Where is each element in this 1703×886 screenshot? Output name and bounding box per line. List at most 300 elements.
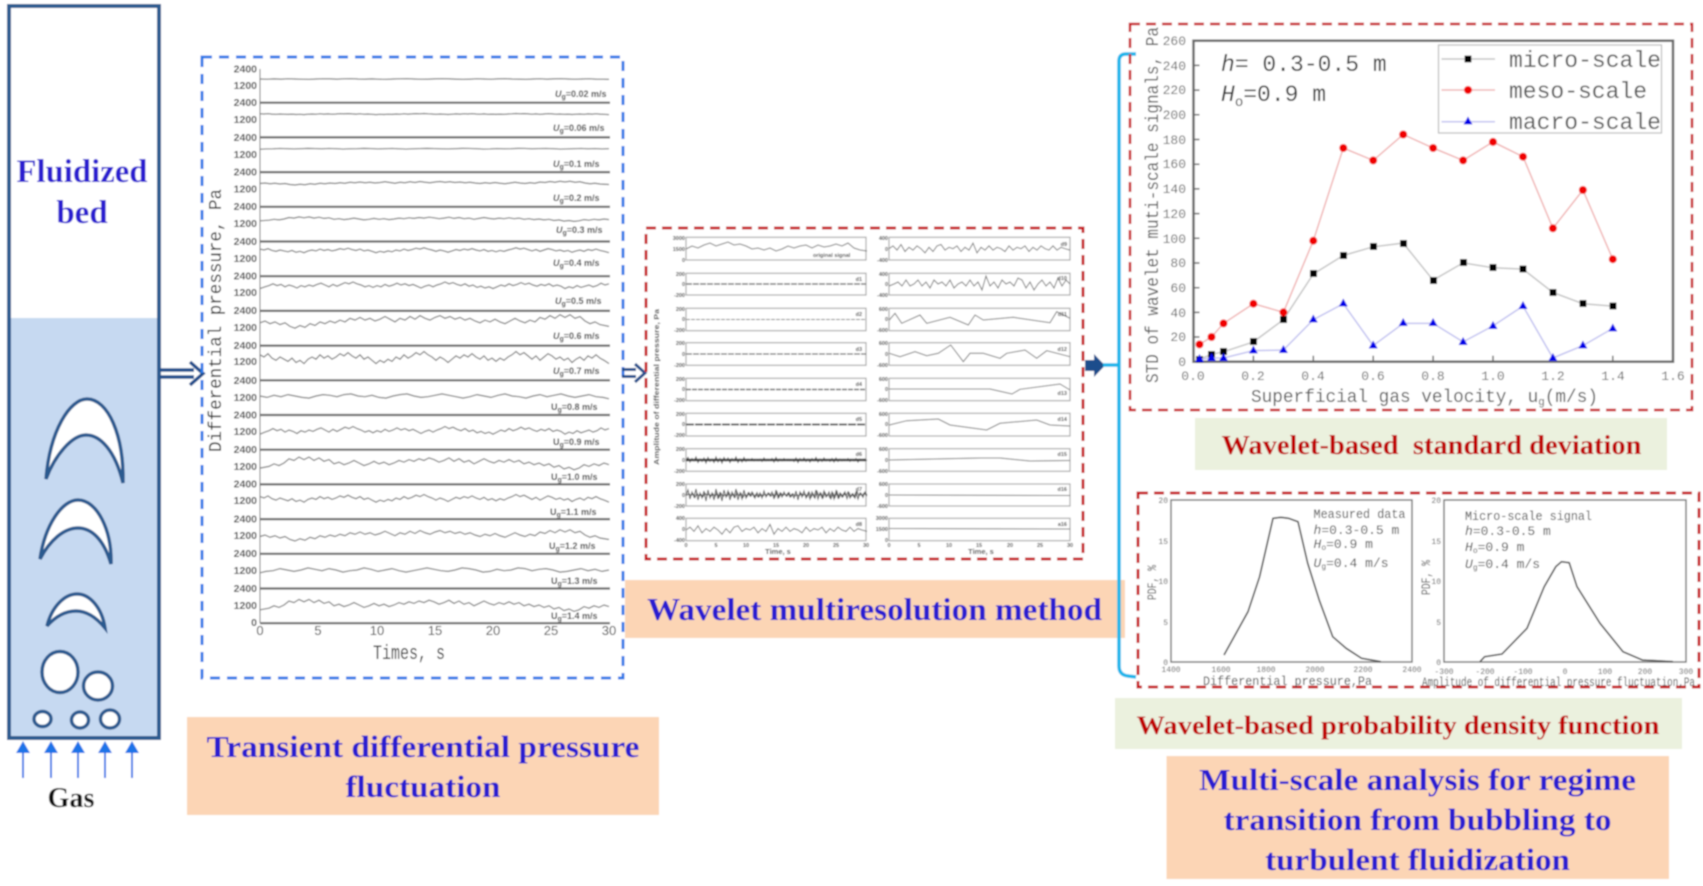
subplot x tick labels and titles: 20	[1007, 543, 1013, 549]
x tick labels: 1.4	[1601, 369, 1625, 384]
label box: multi-scale analysis: transition from bubbling to	[1224, 802, 1612, 837]
y tick labels: 20	[1170, 330, 1186, 345]
gas velocity row labels: g	[556, 512, 561, 519]
left pdf chart: 2000	[1305, 666, 1325, 675]
x tick labels: 20	[486, 623, 500, 638]
subplot y tick labels: 0	[682, 527, 685, 533]
left pdf chart: 2400	[1402, 666, 1422, 675]
y tick labels: 1200	[234, 80, 257, 92]
subplot y tick labels: 0	[885, 352, 888, 358]
annotation: h and H0: =0.9 m	[1243, 82, 1326, 108]
gas velocity row labels: U	[555, 89, 562, 99]
y tick labels: 1200	[234, 114, 257, 126]
subplot y tick labels: 0	[682, 493, 685, 499]
right pdf chart: 0	[1436, 659, 1441, 668]
subplot x tick labels and titles: 20	[803, 543, 809, 549]
subplot y tick labels: 200	[676, 482, 685, 488]
left pdf chart: Measured data	[1314, 507, 1406, 522]
label box: wavelet multiresolution method: Wavelet multiresolution method	[647, 591, 1102, 627]
gas velocity row labels: g	[558, 581, 562, 588]
subplot y tick labels: 200	[676, 412, 685, 418]
subplot y tick labels: -400	[877, 258, 888, 264]
subplot y tick labels: 600	[879, 412, 888, 418]
right pdf chart: U	[1465, 557, 1473, 572]
series: meso-scale	[1196, 130, 1617, 348]
subplot x tick labels and titles	[684, 543, 1073, 556]
y tick labels: 1200	[234, 392, 257, 404]
dashed panel border	[202, 57, 623, 678]
subplot scale labels: d15	[1058, 452, 1067, 458]
y tick labels: 1200	[234, 461, 257, 473]
subplot y tick labels: 0	[885, 458, 888, 464]
gas velocity row labels: g	[560, 371, 564, 378]
panel: transient pressure chart	[202, 57, 623, 678]
gas velocity row labels: g	[558, 477, 562, 484]
subplot y tick labels: 0	[682, 458, 685, 464]
x tick labels: 25	[544, 623, 558, 638]
subplot y tick labels: 600	[879, 307, 888, 313]
y tick labels: 1200	[234, 149, 257, 161]
y tick labels: 140	[1163, 182, 1186, 197]
subplot scale labels	[813, 242, 1068, 528]
left pdf chart: H	[1314, 537, 1322, 552]
subplot y tick labels: 1500	[673, 247, 685, 253]
y tick labels: 2400	[234, 340, 257, 352]
gas velocity row labels: =0.5 m/s	[566, 296, 602, 306]
right pdf chart: =0.9 m	[1478, 540, 1525, 555]
panel: standard deviation chart: (m/s)	[1545, 388, 1598, 408]
y tick labels: 2400	[234, 478, 257, 490]
y tick labels: 240	[1163, 59, 1186, 74]
y tick labels: 120	[1163, 207, 1186, 222]
gas velocity row labels: g	[556, 546, 560, 553]
gas velocity row labels: =0.9 m/s	[564, 437, 600, 447]
right pdf chart: PDF, %	[1419, 560, 1434, 595]
left pdf chart: h=0.3-0.5 m	[1314, 523, 1400, 538]
gas velocity row labels: =1.3 m/s	[562, 576, 598, 586]
y tick labels: 2400	[234, 410, 257, 422]
y tick labels: 2400	[234, 444, 257, 456]
x tick labels: 5	[314, 623, 322, 638]
right pdf chart: 10	[1431, 578, 1441, 587]
subplot y tick labels: 3000	[673, 236, 685, 242]
x tick labels: 0.6	[1361, 369, 1385, 384]
label box: multi-scale analysis: Multi-scale analysis for regime	[1199, 762, 1636, 797]
subplot x tick labels and titles: Time, s	[968, 547, 994, 556]
subplot scale labels: a16	[1058, 522, 1067, 528]
subplot x tick labels and titles: 0	[887, 543, 891, 549]
left pdf chart: o	[1321, 544, 1326, 553]
y axis title: Differential pressure, Pa	[207, 189, 227, 452]
y tick labels	[1163, 34, 1186, 370]
vessel outline	[9, 6, 159, 738]
y tick labels: 1200	[234, 426, 257, 438]
x tick labels: 15	[428, 623, 442, 638]
label box: transient pressure	[187, 717, 659, 815]
panel: standard deviation chart	[1130, 24, 1692, 410]
left pdf chart	[1145, 497, 1422, 689]
right pdf chart: -300	[1434, 668, 1454, 677]
x axis title: Times, s	[373, 643, 445, 666]
y tick labels	[234, 64, 257, 629]
pressure traces for each gas velocity	[260, 79, 609, 611]
subplot x tick labels and titles: 30	[1067, 543, 1073, 549]
y axis title: Amplitude of differential pressure, Pa	[652, 308, 661, 465]
subplot x tick labels and titles: 25	[833, 543, 839, 549]
left pdf chart: 15	[1158, 538, 1168, 547]
y tick labels: 1200	[234, 495, 257, 507]
y tick labels: 2400	[234, 236, 257, 248]
label box: multi-scale analysis: turbulent fluidization	[1265, 842, 1570, 877]
subplot y tick labels: -200	[674, 433, 685, 439]
label box: wavelet-based standard deviation: Wavelet-based standard deviation	[1222, 430, 1642, 460]
y tick labels: 2400	[234, 583, 257, 595]
y tick labels: 1200	[234, 565, 257, 577]
left pdf chart: 2200	[1353, 666, 1373, 675]
subplot x tick labels and titles: 25	[1037, 543, 1043, 549]
left pdf chart: 0	[1163, 659, 1168, 668]
right pdf chart: 200	[1638, 668, 1652, 677]
y tick labels: 1200	[234, 356, 257, 368]
subplot x tick labels and titles: 10	[743, 543, 749, 549]
y tick labels: 1200	[234, 218, 257, 230]
label: Fluidized bed: bed	[56, 195, 108, 231]
subplot y tick labels: -400	[674, 538, 685, 544]
gas velocity row labels: g	[558, 407, 562, 414]
label: Fluidized bed: Fluidized	[16, 154, 148, 190]
gas velocity row labels: =0.7 m/s	[564, 366, 600, 376]
y tick labels: 260	[1163, 34, 1186, 49]
subplot y tick labels: 0	[682, 258, 685, 264]
subplot y tick labels: 0	[885, 247, 888, 253]
subplot y tick labels: -600	[877, 433, 888, 439]
right pdf chart: =0.4 m/s	[1478, 557, 1540, 572]
x tick labels: 1.6	[1661, 369, 1685, 384]
axis ticks	[1194, 41, 1613, 362]
gas velocity row labels: U	[553, 437, 560, 447]
x tick labels	[256, 623, 616, 638]
gas velocity row labels: U	[551, 402, 558, 412]
subplot y tick labels: -600	[877, 504, 888, 510]
y tick labels: 2400	[234, 305, 257, 317]
gas velocity row labels: =0.02 m/s	[566, 89, 607, 99]
x tick labels: 1.2	[1541, 369, 1565, 384]
subplot y tick labels: -200	[674, 363, 685, 369]
gas velocity row labels: g	[560, 263, 564, 270]
subplot scale labels: d14	[1058, 417, 1068, 423]
subplot y tick labels: -600	[877, 469, 888, 475]
x tick labels: 1.0	[1481, 369, 1505, 384]
label box: transient pressure: fluctuation	[346, 769, 500, 804]
left pdf chart: 20	[1158, 497, 1168, 506]
dashed panel border	[646, 228, 1083, 559]
subplot x tick labels and titles: 0	[684, 543, 688, 549]
gas velocity row labels: g	[562, 230, 567, 237]
subplot y tick labels: 0	[885, 317, 888, 323]
subplot y tick labels: 200	[676, 307, 685, 313]
subplot y tick labels: 400	[879, 236, 888, 242]
subplot scale labels: d13	[1058, 391, 1067, 397]
gas velocity row labels: U	[556, 225, 563, 235]
right pdf chart: 300	[1679, 668, 1693, 677]
bracket: analysis group	[1103, 54, 1136, 677]
gas velocity row labels: =0.8 m/s	[562, 402, 598, 412]
gas velocity row labels: =1.2 m/s	[560, 541, 596, 551]
subplot scale labels: d12	[1058, 347, 1067, 353]
subplot scale labels: d10	[1058, 276, 1067, 282]
y tick labels: 1200	[234, 600, 257, 612]
subplot y tick labels: 0	[682, 352, 685, 358]
subplot y tick labels: 0	[885, 538, 888, 544]
subplot x tick labels and titles: 5	[917, 543, 921, 549]
gas velocity row labels: g	[562, 301, 566, 308]
annotation: h and H0: h= 0.3-0.5 m	[1221, 52, 1387, 78]
gas velocity row labels: g	[560, 128, 564, 135]
y tick labels: 2400	[234, 375, 257, 387]
right pdf chart: 5	[1436, 619, 1441, 628]
subplot scale labels: d7	[856, 487, 862, 493]
subplot y tick labels: -400	[877, 293, 888, 299]
subplot scale labels: d8	[856, 522, 862, 528]
subplot y tick labels: 200	[676, 447, 685, 453]
subplot y tick labels: 0	[885, 387, 888, 393]
subplot y tick labels: -200	[674, 504, 685, 510]
right pdf chart: -200	[1475, 668, 1495, 677]
subplot y tick labels: -200	[674, 328, 685, 334]
subplot y tick labels: -600	[877, 398, 888, 404]
subplot scale labels: d3	[856, 347, 862, 353]
subplot x tick labels and titles: 10	[946, 543, 952, 549]
panel: standard deviation chart: g	[1538, 397, 1545, 409]
subplot y tick labels: 400	[676, 516, 685, 522]
y tick labels: 80	[1170, 256, 1186, 271]
right pdf chart: h=0.3-0.5 m	[1465, 524, 1551, 539]
right pdf chart: o	[1473, 547, 1478, 556]
gas velocity row labels	[549, 89, 607, 623]
y tick labels: 1200	[234, 184, 257, 196]
gas velocity row labels: U	[549, 541, 556, 551]
subplot scale labels: d6	[856, 452, 862, 458]
subplot y tick labels: 1500	[876, 527, 888, 533]
subplot scale labels: original signal	[813, 253, 851, 259]
left pdf chart: 1600	[1211, 666, 1231, 675]
subplot scale labels: d5	[856, 417, 862, 423]
subplot x tick labels and titles: Time, s	[765, 547, 791, 556]
subplot x tick labels and titles: 15	[773, 543, 779, 549]
gas velocity row labels: =0.2 m/s	[564, 193, 600, 203]
subplot y tick labels: 600	[879, 447, 888, 453]
subplot x tick labels and titles: 5	[714, 543, 718, 549]
subplot y tick labels: 3000	[876, 516, 888, 522]
icon: small slug bubble	[47, 594, 105, 628]
arrow: wavelet panel to analyses	[1085, 354, 1105, 377]
subplot y tick labels: 0	[885, 493, 888, 499]
legend: micro-scale	[1509, 48, 1661, 74]
label box: multi-scale analysis	[1166, 756, 1669, 879]
y tick labels: 220	[1163, 83, 1186, 98]
x tick labels: 0.8	[1421, 369, 1445, 384]
right pdf chart: 100	[1598, 668, 1612, 677]
y tick labels: 2400	[234, 64, 257, 76]
y tick labels: 0	[1178, 355, 1186, 370]
series: micro-scale	[1196, 240, 1616, 363]
x tick labels: 10	[370, 623, 384, 638]
y tick labels: 0	[251, 617, 257, 629]
gas velocity row labels: =0.06 m/s	[564, 123, 605, 133]
y tick labels: 1200	[234, 322, 257, 334]
annotation: h and H0: H	[1221, 82, 1235, 108]
gas inlet arrows	[16, 741, 139, 778]
left pdf chart: =0.4 m/s	[1326, 556, 1389, 571]
y tick labels: 2400	[234, 514, 257, 526]
gas velocity row labels: U	[551, 611, 558, 621]
y tick labels: 2400	[234, 270, 257, 282]
subplot y tick labels: 600	[879, 482, 888, 488]
y tick labels: 200	[1163, 108, 1186, 123]
subplot scale labels: d1	[856, 277, 862, 283]
gas velocity row labels: =0.3 m/s	[567, 225, 603, 235]
label box: wavelet-based pdf: Wavelet-based probability density function	[1136, 711, 1660, 740]
x tick labels	[1181, 369, 1685, 384]
panel: probability density charts	[1138, 493, 1699, 690]
dashed panel border	[1138, 493, 1699, 687]
subplot frames	[686, 237, 1070, 541]
gas velocity row labels: U	[553, 331, 560, 341]
panel: standard deviation chart: Superficial gas velocity, u	[1251, 388, 1543, 408]
subplot y tick labels: -200	[674, 293, 685, 299]
gas velocity row labels: g	[560, 198, 564, 205]
y tick labels: 1200	[234, 287, 257, 299]
subplot x tick labels and titles: 15	[976, 543, 982, 549]
plot frame	[1194, 41, 1673, 362]
y tick labels: 60	[1170, 281, 1186, 296]
left pdf chart: 1400	[1161, 666, 1181, 675]
subplot y tick labels: 0	[682, 317, 685, 323]
label box: wavelet multiresolution method	[625, 580, 1125, 638]
arrow: bed to pressure chart	[160, 362, 203, 385]
y tick labels: 2400	[234, 97, 257, 109]
subplot y tick labels: -200	[674, 469, 685, 475]
subplot y tick labels: 200	[676, 272, 685, 278]
gas velocity row labels: g	[562, 94, 566, 101]
left pdf chart: 1800	[1256, 666, 1276, 675]
subplot y tick labels: -600	[877, 328, 888, 334]
gas velocity row labels: =1.0 m/s	[562, 472, 598, 482]
left pdf chart: 10	[1158, 578, 1168, 587]
y tick labels: 2400	[234, 201, 257, 213]
y tick labels: 2400	[234, 132, 257, 144]
fluidized bed vessel	[9, 6, 159, 738]
y tick labels: 100	[1163, 232, 1186, 247]
arrow: pressure chart to wavelet panel	[622, 364, 645, 382]
gas velocity row labels: g	[560, 336, 564, 343]
y tick labels: 2400	[234, 548, 257, 560]
subplot x tick labels and titles: 30	[863, 543, 869, 549]
label box: transient pressure: Transient differential pressure	[206, 729, 640, 764]
gas velocity row labels: U	[553, 258, 560, 268]
y tick labels: 1200	[234, 530, 257, 542]
gas velocity row labels: =1.1 m/s	[561, 507, 597, 517]
gas velocity row labels: U	[553, 366, 560, 376]
right pdf chart: 20	[1431, 497, 1441, 506]
right pdf chart: g	[1473, 564, 1478, 573]
subplot y tick labels	[673, 236, 888, 544]
gas velocity row labels: U	[553, 123, 560, 133]
subplot y tick labels: 200	[676, 377, 685, 383]
gas velocity row labels: g	[558, 616, 562, 623]
gas velocity row labels: =0.4 m/s	[564, 258, 600, 268]
right pdf chart: Micro-scale signal	[1465, 509, 1592, 524]
series: macro-scale	[1195, 298, 1617, 362]
gas velocity row labels: =0.1 m/s	[564, 159, 600, 169]
axes and row baselines	[260, 69, 610, 623]
right column signals	[889, 243, 1070, 529]
left pdf chart: =0.9 m	[1326, 537, 1373, 552]
subplot y tick labels: -600	[877, 363, 888, 369]
panel: wavelet multiresolution decomposition	[646, 228, 1083, 559]
legend: meso-scale	[1509, 79, 1647, 105]
left pdf chart: 5	[1163, 619, 1168, 628]
y tick labels: 1200	[234, 253, 257, 265]
left column signals	[686, 242, 867, 534]
left pdf chart: g	[1321, 563, 1326, 572]
subplot y tick labels: 0	[682, 387, 685, 393]
gas velocity row labels: U	[553, 193, 560, 203]
x tick labels: 0.0	[1181, 369, 1205, 384]
right pdf chart: 0	[1563, 668, 1568, 677]
right pdf chart: H	[1465, 540, 1473, 555]
label: Gas: Gas	[48, 783, 95, 814]
gas velocity row labels: U	[553, 159, 560, 169]
gas velocity row labels: U	[551, 472, 558, 482]
right pdf chart: 15	[1431, 538, 1441, 547]
annotation: h and H0	[1221, 52, 1387, 111]
legend	[1438, 45, 1662, 136]
right pdf chart	[1419, 497, 1695, 690]
x tick labels: 0.4	[1301, 369, 1325, 384]
subplot y tick labels: 400	[879, 272, 888, 278]
label: Fluidized bed	[16, 154, 148, 231]
subplot y tick labels: 600	[879, 341, 888, 347]
icon: medium slug bubble	[40, 500, 111, 564]
gas velocity row labels: =0.6 m/s	[564, 331, 600, 341]
left pdf chart: Differential pressure,Pa	[1203, 674, 1372, 689]
x tick labels: 0	[256, 623, 264, 638]
left pdf chart: PDF, %	[1145, 565, 1160, 600]
gas velocity row labels: g	[560, 442, 564, 449]
subplot y tick labels: 0	[885, 282, 888, 288]
gas velocity row labels: U	[551, 576, 558, 586]
x tick labels: 30	[602, 623, 616, 638]
gas velocity row labels: g	[560, 164, 564, 171]
gas velocity row labels: =1.4 m/s	[562, 611, 598, 621]
subplot scale labels: d2	[856, 312, 862, 318]
gas velocity row labels: U	[550, 507, 556, 517]
label box: wavelet-based standard deviation	[1195, 418, 1667, 470]
left pdf chart: U	[1314, 556, 1322, 571]
y tick labels: 40	[1170, 306, 1186, 321]
subplot y tick labels: 0	[682, 422, 685, 428]
icon: large slug bubble	[46, 399, 123, 483]
subplot y tick labels: 0	[682, 282, 685, 288]
icon: round bubbles	[34, 652, 120, 728]
right pdf chart: -100	[1513, 668, 1533, 677]
subplot y tick labels: 200	[676, 341, 685, 347]
subplot scale labels: d4	[856, 382, 863, 388]
legend: macro-scale	[1509, 110, 1661, 136]
subplot y tick labels: 0	[885, 422, 888, 428]
subplot scale labels: d11	[1058, 312, 1067, 318]
